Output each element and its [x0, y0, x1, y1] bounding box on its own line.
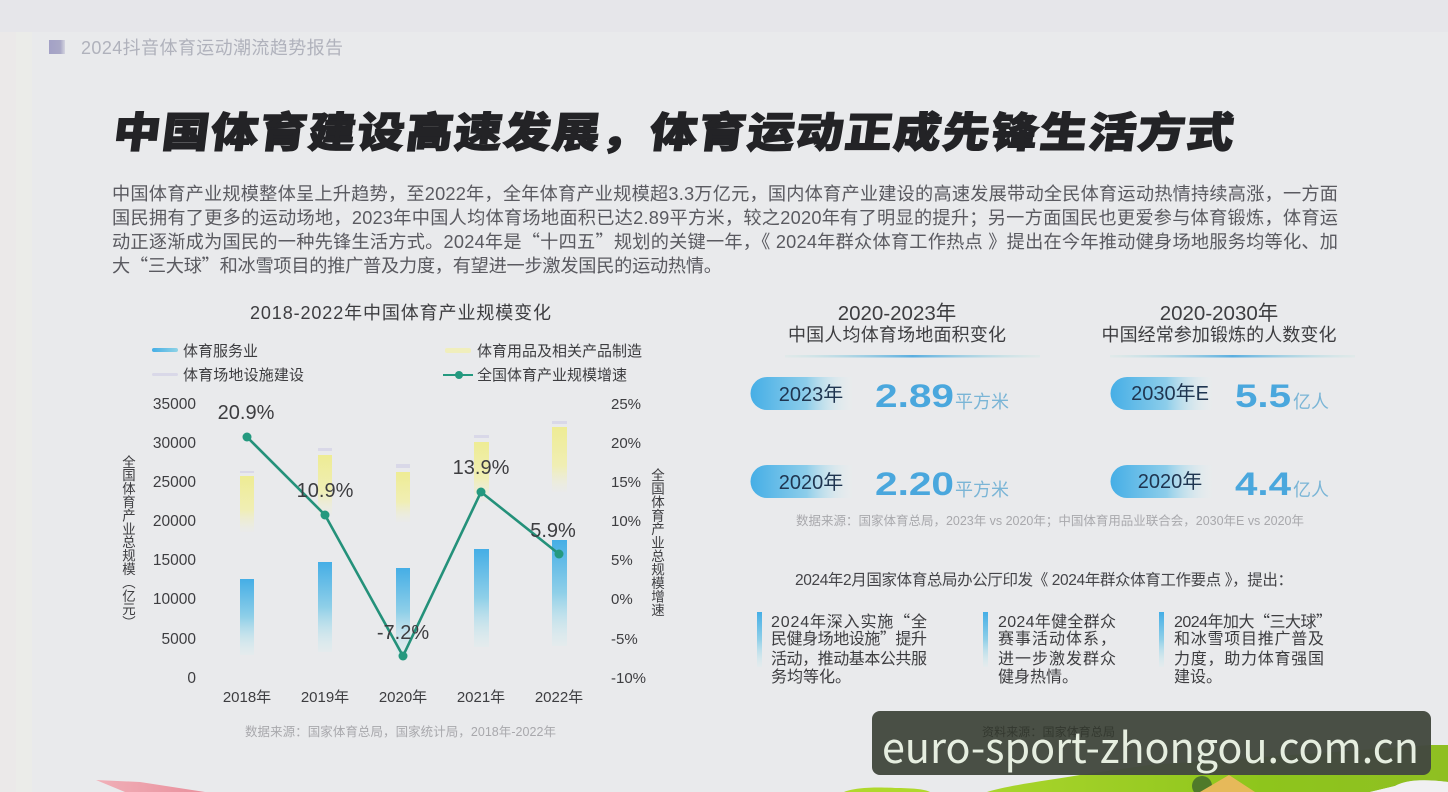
header text: 2024抖音体育运动潮流趋势报告	[81, 38, 343, 58]
legend: 体育服务业	[183, 343, 258, 360]
policy point 3: 力度，助力体育强国	[1174, 650, 1324, 668]
legend: 体育用品及相关产品制造	[477, 343, 642, 360]
stat 2020	[750, 465, 1009, 502]
right axis labels: 15%	[611, 474, 641, 491]
left axis labels: 35000	[153, 396, 196, 413]
stat 2030E: 2030年E	[1131, 382, 1209, 405]
intro paragraph: 动正逐渐成为国民的一种先锋生活方式。2024年是“十四五”规划的关键一年，《 2024年群众体育工作热点 》提出在今年推动健身场地服务均等化、加	[112, 228, 1338, 254]
policy point 3: 建设。	[1174, 668, 1222, 686]
intro paragraph: 国民拥有了更多的运动场地，2023年中国人均体育场地面积已达2.89平方米，较之2020年有了明显的提升；另一方面国民也更爱参与体育锻炼，体育运	[112, 208, 1338, 228]
policy point 1: 活动，推动基本公共服	[771, 650, 927, 668]
policy point 2: 赛事活动体系，	[998, 629, 1116, 648]
heading: 2020-2030年	[1160, 302, 1278, 325]
growth value labels: 5.9%	[530, 520, 576, 542]
stat 2023: 平方米	[955, 392, 1009, 412]
legend	[152, 343, 642, 384]
growth value labels: -7.2%	[377, 622, 429, 644]
stats source: 数据来源：国家体育总局，2023年 vs 2020年；中国体育用品业联合会，2030年E vs 2020年	[796, 513, 1304, 528]
x axis labels: 2019年	[301, 689, 349, 706]
stat 2030E: 亿人	[1293, 392, 1329, 412]
stat 2020: 2020年	[1138, 470, 1202, 493]
left axis labels: 25000	[153, 474, 196, 491]
right axis title: 全国体育产业总规模增速	[648, 467, 668, 618]
chart source: 数据来源：国家体育总局，国家统计局，2018年-2022年	[245, 724, 556, 739]
stacked bars	[240, 421, 567, 656]
left axis labels	[153, 396, 196, 687]
right axis labels: 5%	[611, 552, 633, 569]
left axis title: 全国体育产业总规模（亿元）	[119, 454, 139, 629]
stat 2030E: 5.5	[1235, 378, 1291, 414]
intro paragraph	[112, 184, 1338, 278]
panel: regular exercisers	[1102, 302, 1355, 502]
policy point 1: 民健身场地设施”提升	[771, 625, 927, 649]
left axis labels: 30000	[153, 435, 196, 452]
header marker	[49, 40, 65, 54]
heading	[1102, 302, 1336, 345]
policy intro: 2024年2月国家体育总局办公厅印发《 2024年群众体育工作要点 》，提出：	[795, 571, 1293, 589]
panel: industry scale chart	[119, 303, 668, 739]
heading: 中国经常参加锻炼的人数变化	[1102, 325, 1336, 345]
right axis labels: -5%	[611, 631, 638, 648]
heading: 中国人均体育场地面积变化	[788, 325, 1006, 345]
title: 中国体育建设高速发展，体育运动正成先锋生活方式	[111, 99, 1238, 159]
growth value labels: 13.9%	[453, 457, 510, 479]
stat 2020: 2020年	[779, 471, 843, 494]
stat 2020: 平方米	[955, 480, 1009, 500]
policy point 3: 和冰雪项目推广普及	[1174, 630, 1324, 648]
right axis labels: 10%	[611, 513, 641, 530]
left axis labels: 15000	[153, 552, 196, 569]
panel: venue area per capita	[750, 302, 1040, 502]
left axis labels: 0	[187, 670, 196, 687]
x axis labels: 2018年	[223, 689, 271, 706]
policy point 2	[983, 612, 1116, 686]
x axis labels: 2021年	[457, 689, 505, 706]
growth line	[242, 432, 564, 660]
decoration: pink streak bottom-left	[96, 780, 205, 792]
right axis labels	[611, 396, 646, 687]
left axis labels: 5000	[162, 631, 196, 648]
growth value labels: 20.9%	[218, 402, 275, 424]
policy point 1: 2024年深入实施“全	[771, 608, 927, 632]
stat 2020	[1110, 465, 1329, 502]
watermark: 资料来源：国家体育总局	[982, 724, 1115, 739]
stat 2020: 2.20	[875, 466, 954, 502]
intro paragraph: 大“三大球”和冰雪项目的推广普及力度，有望进一步激发国民的运动热情。	[112, 252, 722, 278]
stat 2023: 2.89	[875, 378, 954, 414]
policy point 2: 健身热情。	[998, 668, 1078, 686]
heading	[788, 302, 1006, 345]
stat 2020: 亿人	[1293, 480, 1329, 500]
stat 2023	[750, 377, 1009, 414]
policy point 1: 务均等化。	[771, 668, 851, 686]
legend: 全国体育产业规模增速	[477, 366, 627, 384]
policy point 2: 进一步激发群众	[998, 650, 1116, 668]
right axis labels: -10%	[611, 670, 646, 687]
stat 2020: 4.4	[1235, 466, 1291, 502]
policy point 3	[1159, 608, 1332, 686]
watermark: euro-sport-zhongou.com.cn	[882, 715, 1419, 776]
x axis labels	[223, 689, 583, 706]
policy point 1	[757, 608, 927, 686]
growth value labels: 10.9%	[297, 480, 354, 502]
x axis labels: 2020年	[379, 689, 427, 706]
chart title: 2018-2022年中国体育产业规模变化	[250, 303, 551, 323]
growth value labels	[218, 402, 576, 644]
left axis labels: 20000	[153, 513, 196, 530]
stat 2030E	[1110, 377, 1329, 414]
policy point 2: 2024年健全群众	[998, 613, 1116, 631]
intro paragraph: 中国体育产业规模整体呈上升趋势，至2022年，全年体育产业规模超3.3万亿元，国内体育产业建设的高速发展带动全民体育运动热情持续高涨，一方面	[112, 184, 1338, 204]
stat 2023: 2023年	[779, 383, 843, 406]
right axis labels: 0%	[611, 591, 633, 608]
right axis labels: 25%	[611, 396, 641, 413]
right axis labels: 20%	[611, 435, 641, 452]
left axis labels: 10000	[153, 591, 196, 608]
legend: 体育场地设施建设	[183, 367, 304, 384]
heading: 2020-2023年	[838, 302, 956, 325]
x axis labels: 2022年	[535, 689, 583, 706]
policy point 3: 2024年加大“三大球”	[1174, 608, 1332, 632]
decoration: green hill bottom-right	[844, 745, 1448, 792]
